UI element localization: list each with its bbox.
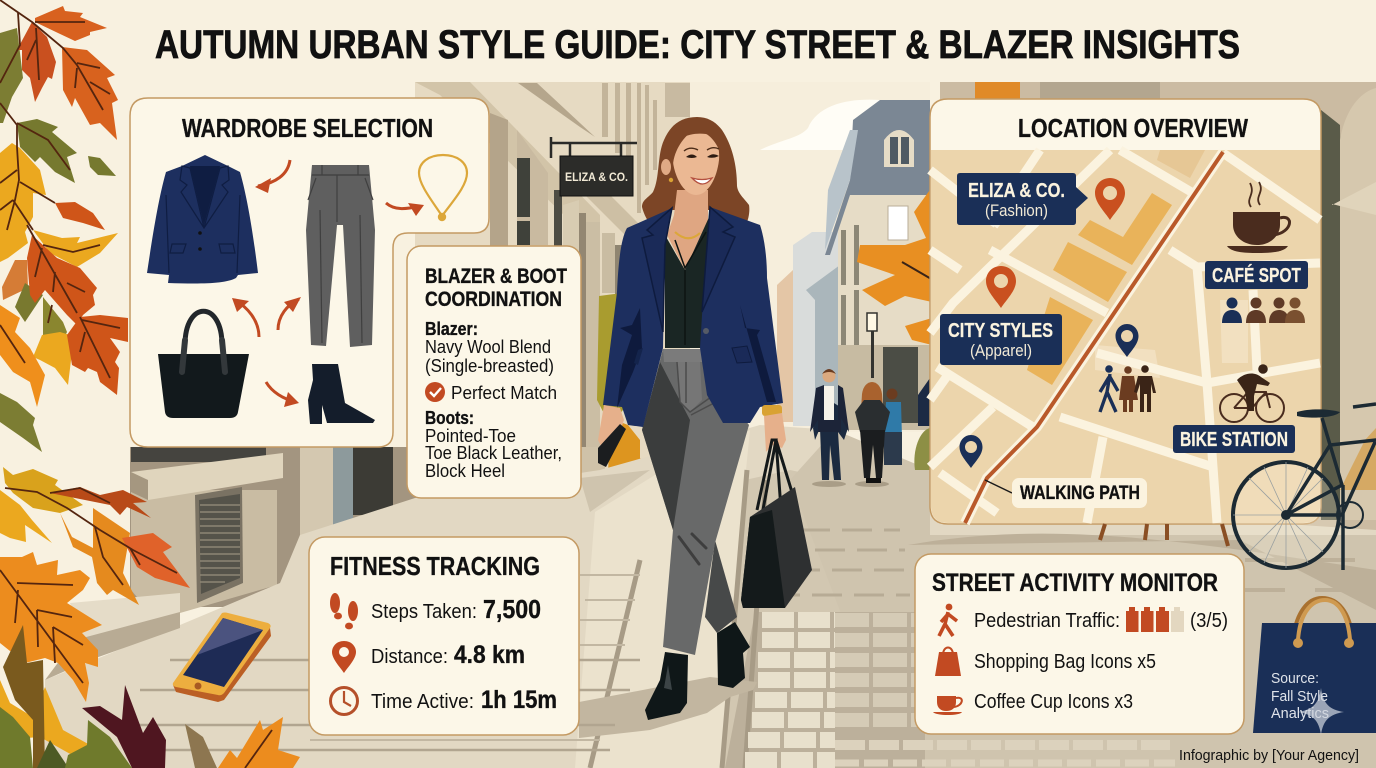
icon: check badge bbox=[425, 382, 445, 402]
heading: STREET ACTIVITY MONITOR bbox=[932, 569, 1218, 597]
right hand bbox=[764, 413, 786, 452]
walking path bbox=[965, 152, 1223, 523]
steps row bbox=[371, 594, 541, 624]
icon: shopping bag bbox=[935, 648, 961, 676]
woman with long hair bbox=[855, 382, 890, 487]
right edge figure bbox=[918, 378, 930, 426]
callout: Eliza & Co. bbox=[957, 173, 1088, 225]
heading bbox=[425, 265, 567, 311]
shop sign: Eliza & Co. bbox=[551, 137, 637, 196]
distance row: Distance: bbox=[371, 646, 448, 668]
callout: City Styles: CITY STYLES bbox=[948, 320, 1053, 342]
distance row: 4.8 km bbox=[454, 641, 525, 669]
bar chart: traffic level 3 of 5 bbox=[1126, 607, 1184, 632]
blazer details bbox=[425, 319, 554, 376]
pavement bbox=[45, 425, 1376, 768]
label: walking path: WALKING PATH bbox=[1020, 483, 1140, 504]
icon: café crowd bbox=[1222, 298, 1305, 323]
boots details bbox=[425, 408, 562, 481]
left building bbox=[415, 82, 690, 502]
panel: location overview bbox=[930, 99, 1321, 524]
sparkle bbox=[1298, 688, 1344, 735]
upper left cluster bbox=[0, 0, 118, 262]
lower left cluster bbox=[0, 467, 190, 702]
stools under map bbox=[1100, 524, 1228, 546]
panel: blazer and boot coordination bbox=[407, 246, 581, 498]
vent bbox=[195, 487, 243, 603]
icon: coffee cup bbox=[1227, 182, 1290, 253]
icon: cyclist bbox=[1220, 364, 1284, 422]
panel: fitness tracking bbox=[309, 537, 579, 735]
blazer details: Navy Wool Blend bbox=[425, 337, 551, 357]
heading: COORDINATION bbox=[425, 288, 562, 311]
arrows bbox=[232, 160, 424, 407]
icon: navy blazer bbox=[147, 155, 258, 283]
label: cafe spot bbox=[1205, 261, 1308, 289]
right buildings bbox=[777, 82, 1376, 532]
blazer details: Blazer: bbox=[425, 319, 478, 339]
callout: City Styles: (Apparel) bbox=[970, 341, 1032, 360]
right blazer panel with sleeve bbox=[700, 207, 783, 423]
icon: navy pin bbox=[960, 435, 982, 468]
source note: Analytics bbox=[1271, 705, 1329, 722]
left hand holding phone bbox=[598, 405, 626, 467]
background pedestrians bbox=[810, 369, 930, 487]
icon: clock bbox=[330, 688, 358, 714]
sky and cloud bbox=[690, 82, 930, 432]
icon: distance pin bbox=[332, 641, 356, 673]
boots details: Boots: bbox=[425, 408, 474, 428]
distance row bbox=[371, 641, 525, 669]
main figure: woman walking bbox=[598, 117, 812, 720]
back leg bbox=[705, 540, 737, 633]
ear bbox=[661, 159, 671, 175]
source note bbox=[1271, 670, 1329, 722]
panel: wardrobe selection bbox=[130, 98, 489, 447]
steps row: Steps Taken: bbox=[371, 601, 477, 623]
credit line: Infographic by [Your Agency] bbox=[1179, 747, 1359, 764]
callout: Eliza & Co.: (Fashion) bbox=[985, 201, 1048, 220]
stone wall with vent bbox=[130, 447, 420, 613]
face bbox=[672, 134, 719, 195]
hair bbox=[642, 117, 749, 226]
blue-jacket pedestrian bbox=[884, 388, 902, 465]
icon: black tote bag bbox=[158, 311, 249, 418]
front boot bbox=[645, 652, 688, 720]
icon: orange pin bbox=[1095, 178, 1125, 220]
time row bbox=[371, 686, 557, 714]
traffic value: (3/5) bbox=[1190, 610, 1228, 632]
man in dark blazer bbox=[810, 369, 849, 487]
boots details: Toe Black Leather, bbox=[425, 443, 562, 463]
trousers bbox=[642, 349, 749, 655]
time row: Time Active: bbox=[371, 691, 474, 713]
heading: WARDROBE SELECTION bbox=[182, 113, 433, 143]
callout: Eliza & Co.: ELIZA & CO. bbox=[968, 180, 1065, 202]
source note: Source: bbox=[1271, 670, 1319, 687]
watch bbox=[762, 405, 782, 416]
bush and fallen leaves bbox=[597, 293, 650, 475]
shop sign: Eliza & Co.: ELIZA & CO. bbox=[565, 170, 628, 184]
black shirt bbox=[665, 215, 710, 348]
middle left cluster bbox=[0, 225, 128, 452]
neck and chest bbox=[667, 190, 708, 270]
blazer details: (Single-breasted) bbox=[425, 356, 554, 376]
autumn leaves bbox=[0, 0, 300, 768]
label: walking path bbox=[985, 478, 1147, 508]
orange tree bbox=[857, 187, 932, 345]
left blazer panel with sleeve bbox=[603, 208, 672, 427]
source shopping bag bbox=[1253, 598, 1376, 735]
icon: pedestrian bbox=[939, 604, 957, 636]
necklace bbox=[675, 232, 700, 238]
back boot bbox=[717, 622, 750, 688]
icon: coffee cup bbox=[933, 696, 962, 715]
icon: footprints bbox=[330, 593, 358, 629]
icon: grey trousers bbox=[306, 165, 375, 347]
map bbox=[930, 150, 1320, 523]
perfect match: Perfect Match bbox=[451, 383, 557, 403]
icon: gold necklace bbox=[419, 155, 467, 221]
boots details: Block Heel bbox=[425, 461, 505, 481]
label: cafe spot: CAFÉ SPOT bbox=[1212, 264, 1301, 287]
arch behind map bbox=[940, 82, 1376, 532]
bottom foliage bbox=[0, 625, 300, 768]
time row: 1h 15m bbox=[481, 686, 557, 714]
icon: navy pin bbox=[1116, 324, 1138, 357]
phone on pavement bbox=[173, 612, 271, 702]
bicycle bbox=[1233, 404, 1376, 570]
label: bike station bbox=[1173, 425, 1295, 453]
steps row: 7,500 bbox=[483, 594, 541, 624]
hair fringe bbox=[668, 118, 720, 165]
bush bbox=[914, 428, 930, 470]
heading: FITNESS TRACKING bbox=[330, 551, 540, 581]
pedestrian traffic row: Pedestrian Traffic: bbox=[974, 610, 1120, 632]
tote bag bbox=[741, 440, 812, 608]
source note: Fall Style bbox=[1271, 688, 1328, 705]
icon: walking people bbox=[1100, 365, 1156, 412]
icon: ankle boot bbox=[308, 364, 375, 424]
heading: LOCATION OVERVIEW bbox=[1018, 113, 1248, 143]
heading: BLAZER & BOOT bbox=[425, 265, 567, 288]
icon: orange pin bbox=[986, 266, 1016, 308]
callout: City Styles bbox=[940, 314, 1062, 365]
label: bike station: BIKE STATION bbox=[1180, 429, 1288, 451]
coffee cup row: Coffee Cup Icons x3 bbox=[974, 691, 1133, 713]
facial features bbox=[669, 148, 719, 184]
boots details: Pointed-Toe bbox=[425, 426, 516, 446]
shopping bag row: Shopping Bag Icons x5 bbox=[974, 651, 1156, 673]
street lamp bbox=[867, 313, 877, 378]
panel: street activity monitor bbox=[915, 554, 1244, 734]
